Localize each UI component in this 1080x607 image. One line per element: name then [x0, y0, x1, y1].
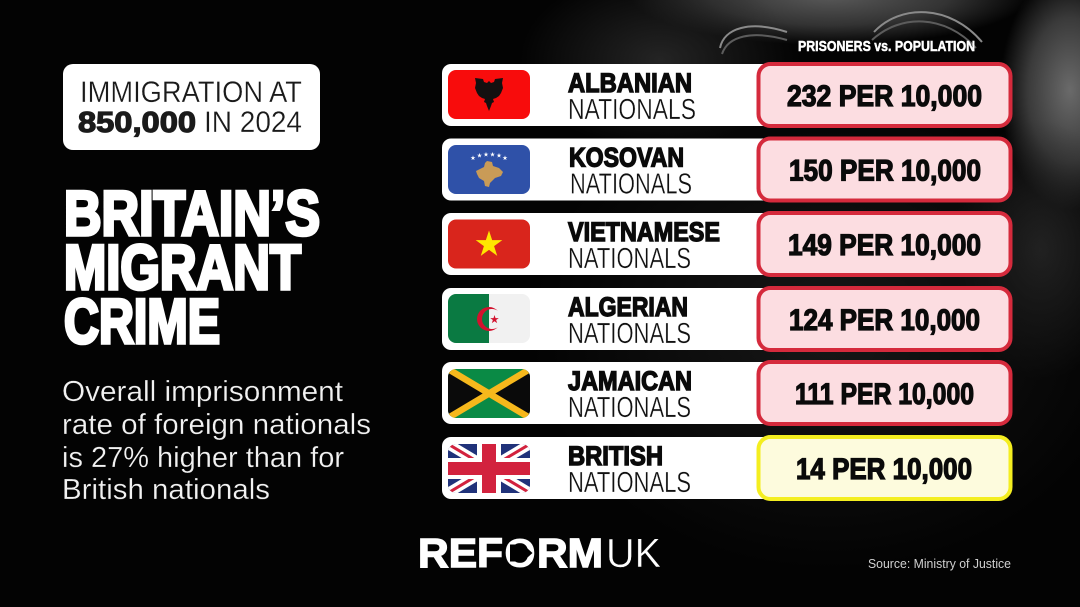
source note: Source: Ministry of Justice	[868, 557, 1011, 571]
row: British nationals: 14 PER 10,000	[796, 453, 972, 486]
text block: imprisonment rate statement: is 27% higher than for	[62, 442, 344, 474]
logo: Reform UK: UK	[606, 530, 661, 576]
row: Kosovan nationals: NATIONALS	[570, 168, 692, 200]
logo: Reform UK: O	[504, 530, 536, 576]
row: Jamaican nationals	[442, 362, 1010, 424]
row: Jamaican nationals: JAMAICAN	[568, 366, 692, 396]
row: Algerian nationals: 124 PER 10,000	[789, 304, 980, 337]
row: Albanian nationals: 232 PER 10,000	[787, 80, 982, 113]
flag: Vietnam	[448, 220, 530, 268]
flag: Albania	[448, 70, 530, 119]
row: Vietnamese nationals: 149 PER 10,000	[788, 229, 981, 262]
row: Jamaican nationals: NATIONALS	[568, 392, 691, 424]
text block: imprisonment rate statement: British nationals	[62, 474, 270, 506]
callout: immigration figure: 850,000	[78, 107, 196, 139]
logo: Reform UK: RM	[537, 530, 603, 576]
row: Jamaican nationals: 111 PER 10,000	[795, 378, 974, 411]
callout: immigration figure	[63, 64, 320, 150]
row: British nationals: NATIONALS	[568, 467, 691, 499]
callout: immigration figure: IN 2024	[204, 106, 302, 139]
text block: imprisonment rate statement: rate of foreign nationals	[62, 409, 371, 441]
title: CRIME	[64, 287, 220, 357]
row: British nationals: BRITISH	[568, 441, 663, 471]
row: Kosovan nationals	[442, 138, 1010, 200]
row: Algerian nationals: ALGERIAN	[568, 292, 688, 322]
logo: Reform UK	[418, 530, 661, 576]
row: Albanian nationals: NATIONALS	[568, 94, 696, 126]
row: Kosovan nationals: KOSOVAN	[569, 142, 684, 172]
callout: immigration figure: IMMIGRATION AT	[80, 76, 302, 109]
flag: Kosovo	[448, 145, 530, 194]
logo: Reform UK: REF	[418, 530, 503, 576]
flag: Jamaica	[448, 369, 530, 418]
row: Vietnamese nationals	[442, 213, 1010, 275]
row: Vietnamese nationals: VIETNAMESE	[568, 217, 720, 247]
title: MIGRANT	[64, 233, 301, 303]
row: British nationals	[442, 437, 1010, 499]
row: Kosovan nationals: 150 PER 10,000	[789, 154, 981, 188]
row: Albanian nationals: ALBANIAN	[568, 68, 692, 98]
text block: imprisonment rate statement: Overall imprisonment	[62, 376, 343, 408]
flag: United Kingdom	[448, 444, 530, 493]
row: Algerian nationals: NATIONALS	[568, 318, 691, 350]
row: Algerian nationals	[442, 288, 1010, 350]
flag: Algeria	[448, 294, 530, 343]
row: Albanian nationals	[442, 64, 1010, 126]
text block: imprisonment rate statement	[62, 376, 371, 506]
title	[64, 179, 320, 357]
row: Vietnamese nationals: NATIONALS	[568, 243, 691, 275]
column heading: PRISONERS vs. POPULATION	[798, 39, 975, 55]
title: BRITAIN’S	[64, 179, 320, 249]
